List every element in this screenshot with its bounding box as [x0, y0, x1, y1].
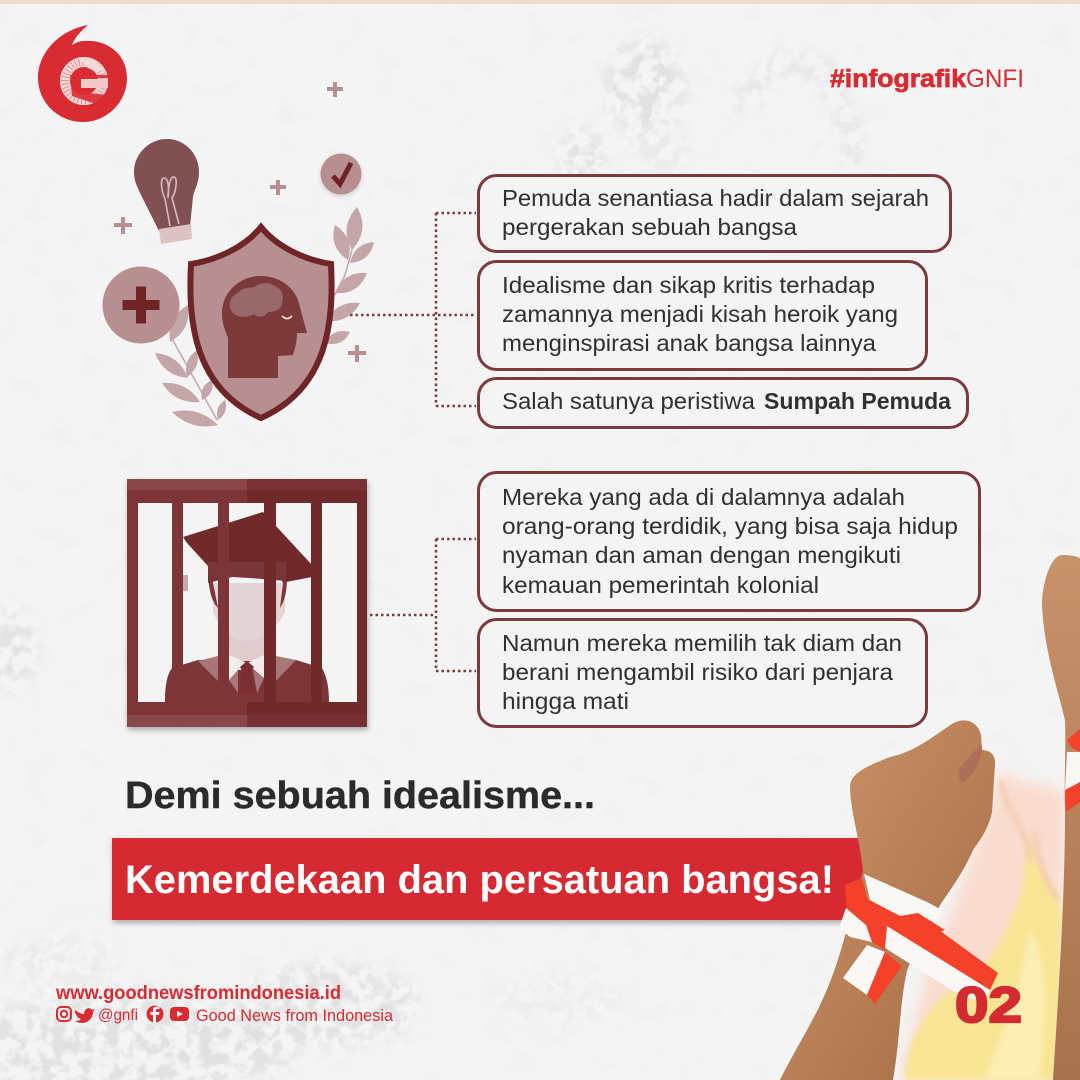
- right leaves: [325, 207, 374, 344]
- cap crown: [208, 540, 286, 583]
- page number: 02: [955, 977, 1022, 1033]
- icon: light bulb: [134, 139, 199, 244]
- callout: bottom group 1: orang-orang terdidik, yang bisa saja hidup: [502, 513, 958, 539]
- hair: [208, 567, 287, 608]
- ribbon white: [1065, 752, 1080, 790]
- hand: right fist with ribbon: [1042, 555, 1080, 1080]
- tassel: [183, 575, 188, 591]
- inner lapels: [229, 670, 264, 693]
- face: [213, 583, 285, 641]
- icon: check circle: [320, 154, 362, 194]
- hashtag: GNFI: [966, 65, 1024, 93]
- small plus marks: [114, 82, 366, 362]
- callout: top group 3: [478, 378, 968, 428]
- ribbon wrap red: [868, 900, 945, 950]
- callout: bottom group 1: nyaman dan aman dengan mengikuti: [502, 542, 901, 568]
- lower tail white: [843, 945, 885, 995]
- outer lapels: [198, 656, 296, 681]
- illustration: shield with brain: [102, 82, 374, 426]
- icon: youtube: [170, 1007, 189, 1021]
- icon: twitter: [75, 1008, 95, 1023]
- window background: [138, 503, 357, 702]
- heading: Demi sebuah idealisme...: [125, 775, 595, 817]
- callout: bottom group 1: kemauan pemerintah kolonial: [502, 572, 819, 598]
- icon: instagram: [57, 1007, 71, 1021]
- callout: bottom group 2: Namun mereka memilih tak diam dan: [502, 630, 902, 656]
- callout: top group 3: Sumpah Pemuda: [764, 388, 951, 414]
- callout: top group 1: pergerakan sebuah bangsa: [502, 214, 797, 240]
- ribbon red: [1065, 729, 1080, 812]
- icon: plus circle: [102, 266, 180, 344]
- footer website: www.goodnewsfromindonesia.id: [55, 983, 341, 1004]
- icon: head: [222, 276, 307, 378]
- long tail white: [885, 926, 990, 1002]
- callout: bottom group 1: Mereka yang ada di dalamnya adalah: [502, 484, 905, 510]
- callout: top group 2: menginspirasi anak bangsa lainnya: [502, 330, 876, 356]
- callout: bottom group 2: [478, 620, 926, 726]
- callout: bottom group 1: [478, 472, 980, 610]
- callout: top group 2: [478, 262, 926, 370]
- channel name: Good News from Indonesia: [196, 1006, 394, 1025]
- banner: [112, 838, 872, 920]
- figure: graduate: [165, 512, 329, 702]
- flames: [900, 770, 1066, 1080]
- icon: brain: [230, 283, 283, 317]
- neck: [226, 625, 268, 661]
- callout: top group 1: Pemuda senantiasa hadir dalam sejarah: [502, 185, 929, 211]
- banner: Kemerdekaan dan persatuan bangsa!: [125, 858, 834, 902]
- background blotches: [0, 37, 855, 1080]
- callout: top group 2: Idealisme dan sikap kritis terhadap: [502, 272, 875, 298]
- left leaves: [155, 305, 226, 426]
- lower tail red: [867, 952, 902, 1004]
- callout: top group 2: zamannya menjadi kisah heroik yang: [502, 301, 898, 327]
- connector: top group: [350, 213, 476, 406]
- icon: facebook: [146, 1006, 164, 1023]
- callout: top group 1: [478, 176, 950, 252]
- ribbon knot red: [845, 878, 874, 942]
- illustration: graduate behind bars: [127, 479, 367, 727]
- shield: [190, 227, 332, 418]
- callout: bottom group 2: berani mengambil risiko dari penjara: [502, 659, 893, 685]
- mortarboard: [183, 512, 312, 582]
- ribbon knot white: [839, 908, 872, 942]
- callout: bottom group 2: hingga mati: [502, 688, 629, 714]
- hashtag: #infografik: [830, 65, 966, 93]
- hand: left fist with ribbon: [780, 720, 998, 1080]
- connector: bottom group: [370, 539, 476, 671]
- bars: [127, 479, 367, 727]
- footer social: [57, 1006, 394, 1025]
- icon: closed eye: [282, 316, 292, 318]
- shirt: [229, 655, 264, 680]
- callout: top group 3: Salah satunya peristiwa: [502, 388, 755, 414]
- arm and fist: [780, 720, 995, 1080]
- handle: @gnfi: [98, 1007, 138, 1024]
- suit: [165, 660, 329, 702]
- finger fold: [959, 745, 982, 783]
- ribbon wrap white: [864, 874, 942, 922]
- tie: [238, 661, 256, 693]
- top strip: [0, 0, 1080, 4]
- arm and fist: [1042, 555, 1080, 1080]
- logo: [38, 25, 127, 122]
- long tail red: [887, 914, 998, 990]
